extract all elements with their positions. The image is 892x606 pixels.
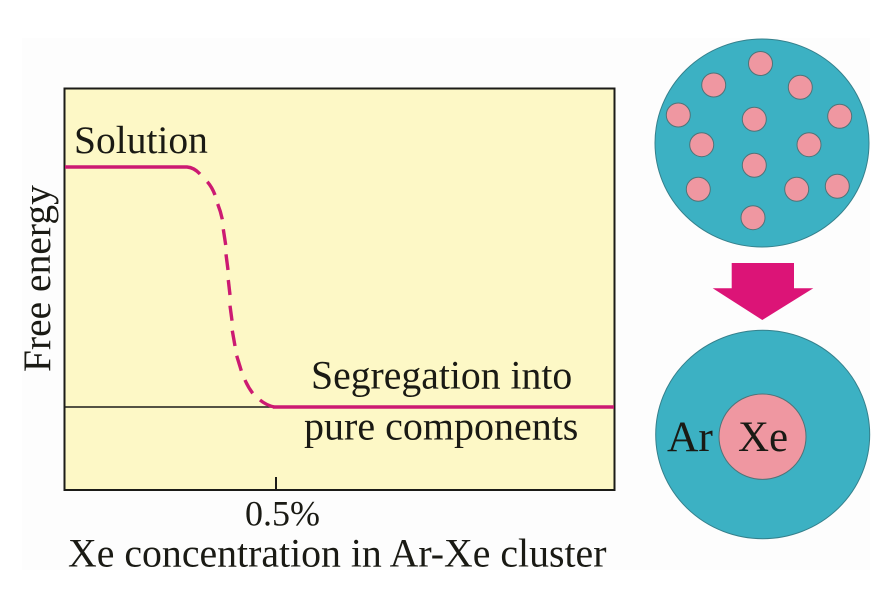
Ar cluster [655, 39, 869, 247]
solution curve solid [65, 167, 200, 174]
panel: dispersed Xe in Ar cluster [655, 39, 869, 247]
label: Xe: Xe [738, 414, 788, 461]
panel: segregated cluster [656, 330, 870, 539]
Xe core [719, 394, 806, 479]
label: 0.5%: 0.5% [245, 494, 320, 534]
label: Ar: Ar [667, 413, 713, 461]
label: pure components: pure components [304, 404, 578, 448]
baseline [65, 406, 275, 408]
label: segregation: Segregation into [311, 354, 572, 398]
chart plot area [64, 88, 614, 490]
segregation line solid [273, 405, 614, 409]
transition curve dashed [207, 182, 274, 407]
x axis title: Xe concentration in Ar-Xe cluster [68, 532, 606, 576]
tick at 0.5% [275, 477, 277, 490]
panel: free energy chart [15, 88, 614, 576]
y axis title: Free energy [15, 185, 59, 372]
label: solution: Solution [74, 118, 208, 162]
Ar shell [656, 330, 870, 539]
Xe atoms [666, 52, 852, 230]
arrow: down [713, 263, 813, 320]
